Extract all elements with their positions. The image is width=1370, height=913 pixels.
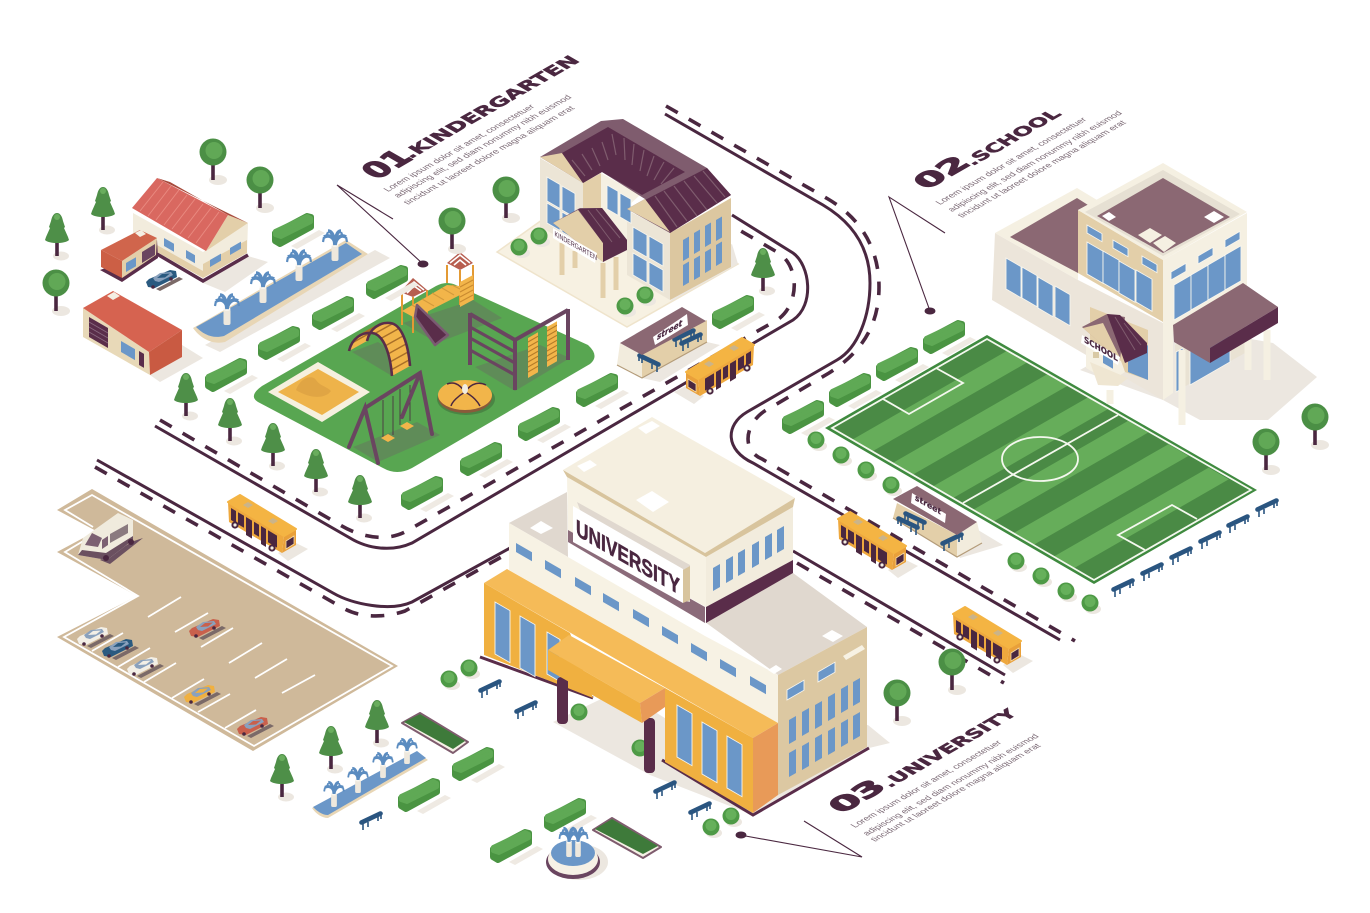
kindergarten portico — [553, 208, 627, 298]
heading: 01 kindergarten — [354, 53, 585, 184]
road: lower right road — [793, 551, 1005, 683]
bus stop by field — [893, 486, 1003, 558]
fountain — [546, 828, 608, 880]
car: navy by house — [146, 270, 183, 291]
bus stop by kindergarten — [617, 307, 720, 382]
road: main curving road — [665, 106, 1075, 641]
heading: 01 kindergarten: 01 — [354, 145, 421, 184]
text block: university description: Lorem ipsum dolor sit amet, consectetuer — [848, 739, 1004, 829]
school entrance: SCHOOL — [1084, 335, 1118, 365]
playground lawn — [254, 283, 595, 472]
kindergarten bushes — [510, 228, 656, 317]
university canopy and pillars — [548, 635, 665, 773]
text block: school description: adipiscing elit, sed diam nonummy nibh euismod — [945, 109, 1124, 213]
heading: 02 school: 02 — [906, 152, 978, 194]
kindergarten building — [497, 119, 738, 327]
text block: university description: tincidunt ut laoreet dolore magna aliquam erat — [868, 742, 1043, 843]
pond with palms — [193, 231, 390, 352]
heading: 03 university: .UNIVERSITY — [877, 706, 1023, 791]
heading: 01 kindergarten: .KINDERGARTEN — [397, 53, 585, 162]
heading: 03 university: 03 — [821, 775, 894, 818]
bus stop by kindergarten: street — [657, 318, 683, 343]
parking lot — [57, 489, 398, 751]
text block: kindergarten description: tincidunt ut laoreet dolore magna aliquam erat — [401, 104, 577, 206]
football field — [825, 335, 1257, 584]
university orange annex — [484, 569, 778, 813]
university top block — [563, 417, 795, 623]
text block: school description: Lorem ipsum dolor sit amet, consectetuer — [933, 116, 1089, 206]
planter: near pond — [402, 713, 468, 753]
field hedges bushes benches — [785, 323, 1329, 726]
lower pond with palms — [312, 739, 428, 818]
carousel — [437, 380, 495, 415]
park trees and hedges — [42, 138, 775, 522]
text block: school description: tincidunt ut laoreet dolore magna aliquam erat — [955, 119, 1129, 219]
heading: 02 school — [906, 107, 1067, 194]
school canopy — [1110, 283, 1278, 425]
callout: university pointer — [736, 821, 862, 857]
heading: 03 university — [821, 706, 1023, 818]
monkey bars and climbing wall — [470, 309, 570, 391]
bus: parking road — [228, 495, 308, 561]
white van — [78, 513, 143, 564]
university building — [480, 417, 890, 815]
planter: near fountain — [593, 818, 661, 858]
bus stop by field: street — [915, 493, 942, 518]
cars in parking lot — [77, 619, 274, 738]
university sign: UNIVERSITY — [576, 514, 680, 600]
arch ladder — [349, 323, 412, 376]
university bushes behind pillars — [570, 704, 651, 759]
road: kindergarten loop — [155, 215, 808, 548]
bus: kindergarten road — [674, 338, 754, 404]
callout: school pointer — [889, 197, 945, 314]
lower park trees and hedges — [270, 700, 597, 865]
text block: kindergarten description: adipiscing elit, sed diam nonummy nibh euismod — [391, 93, 574, 199]
lower red garage — [83, 291, 203, 382]
school building — [992, 163, 1317, 425]
road: parking access road — [95, 460, 510, 616]
slide tower — [400, 252, 502, 345]
text block: university description: adipiscing elit, sed diam nonummy nibh euismod — [860, 732, 1041, 837]
text block: kindergarten description: Lorem ipsum dolor sit amet, consectetuer — [381, 103, 537, 193]
school entrance — [1081, 307, 1148, 386]
side garage — [100, 230, 158, 282]
buses: lower right roads — [838, 512, 1033, 673]
swing set — [349, 373, 440, 463]
university side bushes and benches — [362, 660, 742, 838]
kindergarten portico: KINDERGARTEN — [554, 229, 597, 263]
heading: 02 school: .SCHOOL — [960, 107, 1067, 169]
house with red roof — [132, 178, 268, 292]
sandbox — [268, 362, 370, 422]
callout: kindergarten pointer — [337, 185, 428, 268]
